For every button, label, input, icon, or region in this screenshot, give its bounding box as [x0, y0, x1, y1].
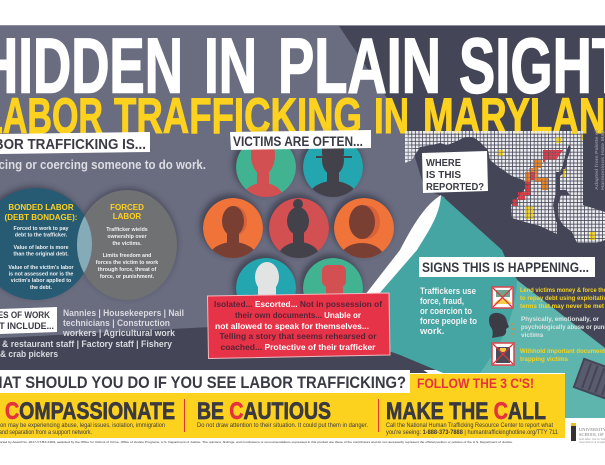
intro text: force people to — [420, 316, 477, 326]
bonded labor text: Forced to work to pay — [13, 226, 69, 232]
chart: maryland dot map — [405, 129, 605, 243]
bonded labor text: the debt. — [30, 285, 53, 291]
portrait: teal with white figure — [236, 258, 296, 295]
list of jobs — [0, 308, 184, 360]
yellow call-to-action banner — [410, 374, 565, 394]
panel: labor trafficking definition — [0, 132, 206, 172]
bonded labor text: Value of labor is more — [13, 245, 69, 251]
column: make the call: you're seeing: 1-888-373-7888 | humantraffickinghotline.org/TTY 711 — [386, 430, 559, 436]
forced labor text: FORCED — [110, 203, 144, 212]
logo: university school of social work — [571, 423, 605, 444]
portrait circle shadows — [200, 133, 393, 316]
title: hidden in plain sight: IN — [204, 22, 257, 110]
panel: types of work — [0, 307, 184, 360]
title: hidden in plain sight: PLAIN — [278, 22, 441, 110]
venn diagram: bonded and forced labor — [0, 186, 177, 300]
panel: signs this is happening — [419, 257, 605, 365]
bonded labor text: than the original debt. — [13, 252, 69, 258]
column: make the call — [386, 398, 559, 436]
panel: what to do — [0, 370, 565, 438]
yellow hot spots — [498, 131, 596, 240]
orange hot spots — [525, 160, 548, 190]
column: be cautious: Do not draw attention to their situation. It could put them in danger. — [197, 423, 368, 429]
list of jobs: & crab pickers — [0, 349, 58, 360]
portrait: orange right — [334, 198, 394, 258]
heading: where is this reported: WHERE — [426, 157, 461, 169]
portrait: teal with hat — [303, 148, 363, 197]
bonded labor text — [5, 203, 77, 291]
callout: red warning signs: not allowed to speak for themselves... — [215, 322, 369, 331]
heading: where is this reported: IS THIS — [426, 169, 461, 181]
callout: red warning signs: Telling a story that seems rehearsed or — [220, 332, 376, 341]
sign text: debt — [520, 287, 605, 310]
white question banner — [0, 370, 410, 394]
map credit: Adapted from Palette of — [594, 129, 599, 190]
chesapeake bay gap — [553, 145, 571, 222]
divider — [184, 399, 185, 432]
heading: where is this reported: REPORTED? — [426, 181, 484, 193]
forced labor text: LABOR — [113, 212, 141, 221]
portrait: green with red figure — [303, 258, 363, 294]
bonded labor text: BONDED LABOR — [8, 203, 74, 212]
intro text — [419, 286, 477, 336]
column: make the call: Call the National Human Trafficking Resource Center to report what — [386, 423, 553, 429]
yellow columns background — [0, 393, 565, 438]
heading: victims are often: VICTIMS ARE OFTEN... — [233, 134, 363, 149]
sign text: abuse: Physically, emotionally, or — [521, 316, 599, 323]
callout: red warning signs: coached... Protective of their trafficker — [220, 343, 376, 352]
forced labor text: force, or punishment. — [100, 274, 155, 280]
intro text: force, fraud, — [420, 296, 464, 306]
intro text: Traffickers use — [420, 286, 476, 296]
bonded labor text: Value of the victim's labor — [8, 265, 74, 271]
panel: victim portraits — [200, 130, 394, 358]
intro text: work. — [419, 326, 444, 336]
heading: where is this reported — [422, 151, 488, 193]
forced labor text: ownership over — [107, 234, 147, 240]
map credit: Harmonious Hate Map — [600, 130, 605, 190]
forced labor text: the victims. — [112, 241, 142, 247]
subtitle: labor trafficking in maryland — [0, 88, 605, 144]
sign text: abuse: victims — [521, 332, 544, 339]
divider — [378, 399, 379, 432]
icon: money crossed out — [492, 287, 513, 308]
subtitle: labor trafficking in maryland: IN — [374, 88, 409, 144]
bonded labor text: victim's labor applied to — [11, 278, 72, 284]
portrait: red with hair bun — [269, 198, 329, 258]
sign text: documents: trapping victims — [520, 356, 568, 363]
portrait: orange left — [203, 198, 263, 258]
callout: red warning signs: their own documents... Unable or — [235, 311, 361, 320]
column: be compassionate: COMPASSIONATE — [5, 398, 175, 425]
forced labor text: through force, threat of — [98, 267, 157, 273]
sign text: abuse — [521, 316, 605, 339]
intro text: or coercion to — [420, 306, 472, 316]
icon: documents crossed out — [492, 343, 514, 365]
heading: victims are often — [230, 130, 371, 150]
forced labor text: forces the victim to work — [96, 260, 158, 266]
heading: labor trafficking is — [0, 132, 150, 154]
icon: jail bars — [574, 359, 605, 399]
list of jobs: Nannies | Housekeepers | Nail — [63, 308, 184, 319]
forced labor text — [96, 203, 158, 280]
subtitle: labor trafficking in maryland: TRAFFICKING — [114, 88, 362, 144]
icon: shouting head — [489, 313, 515, 338]
list of jobs: technicians | Construction — [63, 318, 170, 329]
column: be compassionate — [0, 398, 175, 436]
map credit — [594, 129, 605, 190]
follow the 3 Cs: FOLLOW THE 3 C'S! — [417, 375, 534, 391]
heading: types of work — [0, 307, 57, 334]
forced labor text: Limits freedom and — [103, 253, 151, 259]
list of jobs: & restaurant staff | Factory staff | Fishery — [2, 339, 173, 350]
footer: funding disclaimer: Supported by Award No. 2017-VT-BX-K004, awarded by the Office for Victims of Crime, Office of Justice Programs, U.S. Department of Justice. The opinions, findings, and conclusions or recommendations expressed in this product are those of the contributors and do not necessarily represent the official position or policies of the U.S. Department of Justice. — [0, 440, 513, 444]
title: hidden in plain sight — [0, 22, 605, 110]
bonded labor text: (DEBT BONDAGE): — [5, 213, 77, 222]
list of jobs: workers | Agricultural work — [62, 328, 176, 339]
callout: red warning signs: Isolated... Escorted... Not in possession of — [214, 300, 382, 309]
column: make the call: MAKE THE CALL — [386, 398, 546, 425]
sign text: documents — [520, 348, 605, 363]
bonded labor text: debt to the trafficker. — [15, 232, 68, 238]
column: be cautious: BE CAUTIOUS — [197, 398, 331, 425]
forced labor text: Trafficker wields — [106, 227, 148, 233]
portrait: green — [236, 149, 296, 197]
red hot spots — [512, 150, 563, 206]
bonded labor text: is not assessed nor is the — [9, 272, 73, 278]
callout: red warning signs — [208, 293, 390, 358]
